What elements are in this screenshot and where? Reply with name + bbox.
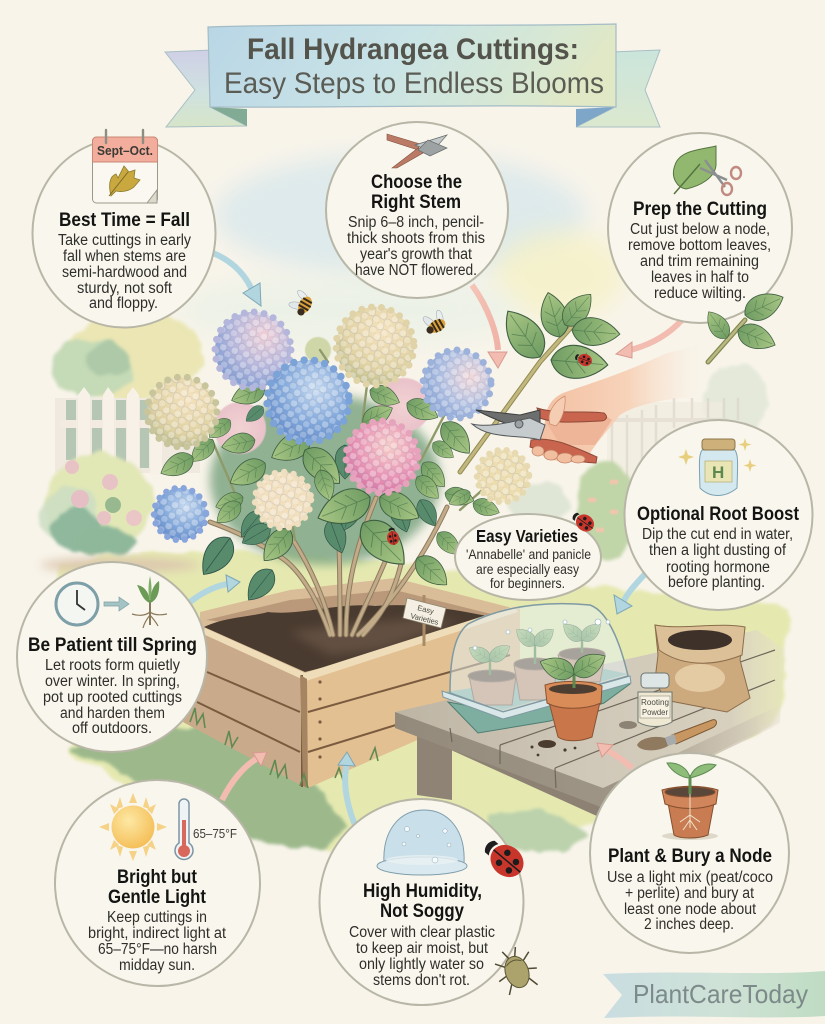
body text: to keep air moist, but — [356, 940, 489, 957]
heading: Be Patient till Spring — [28, 635, 197, 656]
arrow: be patient — [190, 575, 240, 602]
icon: calendar — [92, 130, 158, 203]
ground path left — [40, 558, 200, 572]
thumb — [549, 396, 565, 426]
body text — [628, 221, 771, 302]
temperature label: 65–75°F — [193, 827, 237, 841]
pruner upper handle — [537, 408, 607, 422]
heading: High Humidity, — [363, 881, 482, 902]
arrow: plant — [597, 743, 632, 768]
icon: rooted sprout — [132, 576, 167, 628]
tray body — [448, 678, 630, 733]
panel: easy varieties — [455, 514, 601, 600]
left bush — [40, 454, 153, 557]
title line 1: Fall Hydrangea Cuttings: — [247, 33, 579, 66]
arrow: prep cutting — [616, 320, 682, 358]
propagation dome tray — [442, 604, 631, 741]
body text — [349, 924, 495, 989]
body text: only lightly water so — [359, 956, 484, 973]
body text: leaves in half to — [651, 269, 749, 286]
brand text: PlantCareToday — [633, 979, 808, 1009]
loose cutting right — [701, 286, 788, 362]
soil — [204, 605, 505, 672]
icon: pruners — [387, 134, 447, 168]
ribbon main band — [208, 24, 616, 107]
panel: be patient — [17, 562, 207, 752]
ribbon fold right — [576, 107, 615, 127]
raised wooden bed — [183, 578, 520, 788]
table front edge — [395, 705, 780, 808]
plant label sign: Varieties — [410, 611, 440, 627]
plank lines — [197, 655, 510, 787]
pruning cutting stem — [460, 287, 621, 472]
left green tree — [50, 340, 130, 396]
pruner hook blade — [472, 418, 545, 440]
heading: Easy Varieties — [476, 526, 578, 546]
icon: scissors — [700, 160, 741, 195]
heading: Prep the Cutting — [633, 199, 767, 220]
body text: pot up rooted cuttings — [43, 689, 182, 706]
body text: remove bottom leaves, — [628, 237, 771, 254]
panel: root boost — [624, 420, 812, 610]
icon: clock — [56, 583, 98, 625]
title ribbon — [165, 24, 660, 127]
body text: for beginners. — [490, 575, 565, 591]
workbench table — [395, 630, 785, 822]
arrow: choose stem — [472, 285, 507, 368]
table leg — [417, 732, 452, 800]
body text — [43, 657, 182, 737]
heading: Best Time = Fall — [59, 210, 190, 231]
blooms — [147, 307, 529, 540]
bloom: cream right — [477, 450, 529, 502]
body text: Let roots form quietly — [45, 657, 180, 674]
bloom: big pink — [346, 421, 418, 493]
icon: sun — [99, 793, 167, 861]
panel: prep cutting — [608, 133, 792, 323]
icon: calendar: Sept–Oct. — [97, 144, 153, 158]
body text: 65–75°F—no harsh — [98, 941, 217, 958]
bed left face — [183, 630, 304, 787]
dark grass left — [70, 725, 350, 850]
icon: thermometer — [175, 799, 193, 859]
body text — [347, 214, 485, 279]
rooting powder jar — [638, 673, 672, 726]
right tree — [703, 364, 767, 436]
body text: rooting hormone — [666, 559, 770, 576]
body text: + perlite) and bury at — [625, 885, 755, 902]
left fence — [55, 387, 200, 475]
pale pink background blooms — [214, 337, 431, 454]
bed rim highlight — [203, 606, 518, 681]
body text: and harden them — [60, 705, 165, 722]
soil highlight — [290, 618, 460, 655]
body text: Take cuttings in early — [58, 232, 191, 249]
soil scatter — [530, 721, 637, 756]
body text: bright, indirect light at — [88, 925, 227, 942]
garden watercolor backdrop — [40, 153, 790, 852]
body text: off outdoors. — [72, 720, 152, 737]
body text — [466, 546, 591, 591]
table beam — [440, 730, 612, 822]
bee right — [419, 307, 450, 337]
icon: ladybug on bubble — [569, 508, 597, 535]
right fence — [607, 398, 738, 495]
rooting powder jar: Powder — [642, 708, 668, 717]
arrow: bright light — [222, 752, 267, 800]
icon: small arrow — [104, 597, 129, 611]
body text: Dip the cut end in water, — [642, 526, 793, 543]
body text: sturdy, not soft — [77, 280, 173, 297]
icon: beetle — [490, 943, 542, 997]
panel: choose stem — [326, 122, 508, 298]
heading — [108, 867, 207, 908]
bloom: cream top — [336, 307, 414, 385]
panel: plant node — [590, 753, 789, 953]
shrub ladybug — [385, 527, 400, 546]
body text: year's growth that — [360, 246, 473, 263]
arrow: best time to shrub — [213, 253, 261, 306]
tray floor — [446, 668, 628, 710]
ribbon fold left — [210, 107, 247, 126]
icon: hormone jar — [678, 438, 756, 496]
heading: Choose the — [371, 172, 462, 193]
icon: leaf — [673, 146, 716, 189]
panel: bright light — [55, 780, 260, 986]
left dark tree — [86, 341, 130, 375]
body text: Cut just below a node, — [630, 221, 770, 238]
body text: Cover with clear plastic — [349, 924, 495, 941]
shrub leaves — [156, 377, 502, 607]
tray rim — [442, 676, 631, 719]
forearm and hand — [533, 345, 700, 463]
body text: stems don't rot. — [373, 972, 470, 989]
grass patch right — [490, 810, 590, 852]
body text — [58, 232, 191, 312]
heading: Plant & Bury a Node — [608, 846, 772, 867]
body text: then a light dusting of — [649, 542, 787, 559]
ribbon right tail — [576, 50, 660, 127]
bed grass tufts — [190, 708, 378, 788]
body text: over winter. In spring, — [45, 673, 180, 690]
heading — [363, 881, 482, 922]
body text: Keep cuttings in — [107, 909, 207, 926]
branches — [210, 350, 490, 635]
heading: Optional Root Boost — [637, 504, 800, 525]
soil bag — [655, 625, 750, 712]
body text: have NOT flowered. — [355, 262, 477, 279]
body text: 'Annabelle' and panicle — [466, 546, 591, 562]
palm shading — [545, 412, 612, 445]
dome — [450, 604, 628, 712]
bloom: large blue — [267, 360, 349, 442]
heading — [371, 172, 462, 213]
body text: Snip 6–8 inch, pencil- — [348, 214, 484, 231]
icon: leaf stem — [674, 164, 700, 194]
cutting ladybug — [573, 351, 594, 368]
main pot — [537, 647, 610, 741]
bed inner back rim — [200, 578, 520, 682]
lawn — [55, 552, 790, 852]
icon: potted plant with roots — [662, 763, 718, 840]
body text: semi-hardwood and — [62, 264, 187, 281]
sky lower wash — [180, 274, 520, 346]
pruner lower handle — [530, 439, 597, 463]
body text — [642, 526, 793, 591]
brand banner — [603, 971, 825, 1018]
seedling pots — [466, 619, 605, 705]
bloom: pink-blue — [215, 312, 291, 388]
bee left — [286, 287, 316, 318]
bloom: cream mid — [255, 472, 311, 528]
ribbon left tail — [165, 50, 247, 127]
body text: and trim remaining — [640, 253, 759, 270]
body text: before planting. — [668, 574, 765, 591]
bloom: cream left — [147, 377, 217, 447]
heading: Right Stem — [371, 192, 461, 213]
title line 2: Easy Steps to Endless Blooms — [224, 67, 604, 100]
pruner blades — [476, 410, 540, 432]
body text: midday sun. — [119, 957, 195, 974]
paint brush — [637, 720, 716, 750]
body text: 2 inches deep. — [644, 916, 734, 933]
hydrangea shrub — [147, 307, 529, 635]
right bush — [574, 462, 638, 558]
fingers — [532, 446, 585, 463]
left yellow trees — [67, 309, 203, 401]
icon: ladybug — [478, 833, 530, 884]
heading: Not Soggy — [380, 901, 464, 922]
heading: Bright but — [117, 867, 198, 888]
panel: best time — [32, 130, 216, 328]
plank gaps — [450, 650, 775, 788]
heading: Gentle Light — [108, 887, 207, 908]
body text: least one node about — [624, 901, 757, 918]
right bush blossoms — [590, 482, 616, 530]
body text: fall when stems are — [63, 248, 186, 265]
body text — [607, 869, 773, 933]
hand with pruners — [472, 345, 700, 463]
body text — [88, 909, 227, 974]
body text: thick shoots from this — [347, 230, 485, 247]
icon: hormone jar: H — [712, 463, 724, 482]
arrow: humidity — [338, 752, 355, 825]
centre pale bush — [510, 483, 570, 527]
plant label sign: Easy — [417, 603, 435, 616]
panel: humidity — [320, 799, 542, 1005]
body text: and floppy. — [89, 295, 158, 312]
rooting powder jar: Rooting — [641, 698, 669, 707]
body text: are especially easy — [476, 561, 579, 577]
body text: Use a light mix (peat/coco — [607, 869, 773, 886]
arrow: root boost — [614, 574, 645, 614]
dark foliage mass — [210, 395, 440, 565]
plant label sign — [403, 595, 446, 646]
sky wash — [215, 153, 585, 277]
warm wash — [495, 230, 625, 320]
bloom: blue lower-left — [154, 488, 206, 540]
bed right face — [306, 608, 520, 788]
condensation — [473, 619, 610, 650]
table top — [395, 630, 785, 806]
body text: reduce wilting. — [654, 285, 746, 302]
icon: plastic dome — [377, 810, 467, 875]
bloom: blue right — [423, 350, 491, 418]
corner post — [300, 675, 308, 788]
nails — [318, 680, 322, 759]
back inner wall — [206, 590, 495, 630]
